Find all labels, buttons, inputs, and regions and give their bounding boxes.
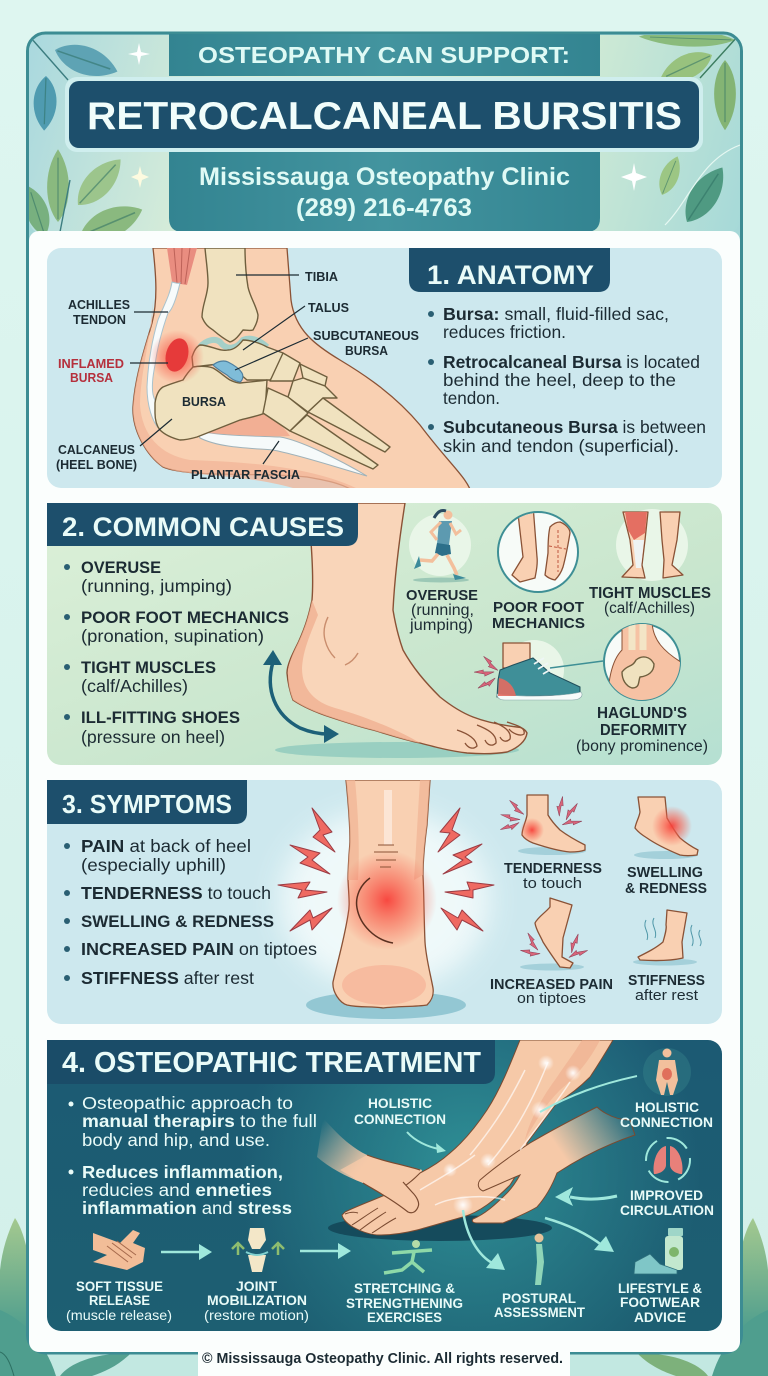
symptoms list [64,836,317,988]
causes list: ILL-FITTING SHOES [81,708,240,727]
overuse label: (running, [411,602,474,619]
holistic connection callout: CONNECTION [354,1112,446,1127]
soft tissue label [66,1279,172,1323]
poor foot mechanics label [492,599,585,632]
holistic connection label right: HOLISTIC [635,1100,699,1115]
symptoms list: STIFFNESS after rest [81,968,254,988]
anatomy labels and leader lines: PLANTAR FASCIA [191,468,300,482]
tight muscles label [589,585,711,617]
swelling label: & REDNESS [625,881,707,897]
stiffness label [628,973,705,1004]
symptoms list: PAIN at back of heel [81,836,251,856]
anatomy labels and leader lines: TIBIA [305,270,338,284]
holistic connection callout [354,1096,446,1153]
heading: anatomy [409,248,610,292]
anatomy bullet text: Bursa: small, fluid-filled sac, [443,304,669,324]
arrow: joint to stretching [300,1243,351,1259]
anatomy labels and leader lines: INFLAMED [58,357,124,371]
lifestyle label: ADVICE [634,1310,686,1325]
header leaves right [639,28,740,229]
clinic banner: (289) 216-4763 [296,194,472,222]
causes list [64,558,289,747]
postural assessment label: POSTURAL [502,1291,576,1306]
anatomy labels and leader lines: (HEEL BONE) [56,458,137,472]
icon: standing person [534,1234,544,1285]
stretching label: STRENGTHENING [346,1296,463,1311]
arrow: soft tissue to joint [161,1244,212,1260]
icon: runner [409,510,471,582]
anatomy labels and leader lines: BURSA [182,395,226,409]
icon: poor foot mechanics [498,505,578,592]
stretching label [346,1281,463,1325]
header background [29,35,740,235]
treatment bullet text: Reduces inflammation, [82,1162,283,1182]
anatomy labels and leader lines: TENDON [73,313,126,327]
symptoms list: TENDERNESS to touch [81,883,271,903]
anatomy bullet text: tendon. [443,388,500,408]
stiffness label: after rest [635,987,699,1004]
poor foot mechanics label: POOR FOOT [493,599,584,616]
tenderness label: to touch [523,875,582,892]
anatomy labels and leader lines [56,270,419,482]
anatomy bullet text: behind the heel, deep to the [443,370,676,390]
anatomy labels and leader lines: BURSA [345,344,388,358]
anatomy bullet text: reduces friction. [443,322,566,342]
treatment bullet text: inflammation and stress [82,1198,292,1218]
causes list: (calf/Achilles) [81,676,188,696]
panel: common causes [47,503,722,765]
anatomy bullet text: Retrocalcaneal Bursa is located [443,352,700,372]
arrow: from body to leg [540,1076,637,1112]
arrow: to lifestyle [545,1218,614,1252]
treatment foot and hands illustration [317,1040,635,1241]
postural assessment label: ASSESSMENT [494,1305,586,1320]
heading: common causes: 2. COMMON CAUSES [62,512,344,542]
soft tissue label: (muscle release) [66,1307,172,1323]
tight muscles label: TIGHT MUSCLES [589,585,711,602]
movement arrow [263,650,339,743]
joint mobilization label [204,1279,309,1323]
swelling label [625,865,707,897]
icon: swelling foot [634,797,698,859]
anatomy labels and leader lines: TALUS [308,301,349,315]
increased pain label [490,977,613,1007]
overuse label [406,587,478,634]
heading: common causes [47,503,358,546]
tenderness label [504,861,602,892]
title [65,77,703,152]
arrow: to foot [555,1187,617,1206]
heel illustration [306,780,466,1019]
lifestyle label: FOOTWEAR [620,1295,700,1310]
symptoms list: SWELLING & REDNESS [81,912,274,931]
stiffness label: STIFFNESS [628,973,705,989]
haglund's deformity label: HAGLUND'S [597,705,687,722]
icon: haglund circle [604,620,684,702]
treatment bullet text: reducies and enneties [82,1180,272,1200]
icon: body holistic [643,1048,691,1096]
heading: osteopathic treatment [47,1040,495,1084]
joint mobilization label: (restore motion) [204,1307,309,1323]
soft tissue label: RELEASE [89,1293,150,1308]
header leaves left [29,40,142,232]
overuse label: OVERUSE [406,587,478,604]
icon: tight muscles legs [616,509,688,581]
icon: soft tissue release [93,1230,145,1270]
icon: shoe [474,640,603,700]
haglund's deformity label: DEFORMITY [600,722,688,739]
treatment bullet text: manual therapirs to the full [82,1111,317,1131]
icon: stretching figure [384,1240,432,1273]
haglund's deformity label: (bony prominence) [576,738,708,755]
top banner [169,34,600,76]
causes list: (pressure on heel) [81,727,225,747]
haglund's deformity label [576,705,708,755]
heading: osteopathic treatment: 4. OSTEOPATHIC TREATMENT [62,1047,481,1079]
improved circulation label: CIRCULATION [620,1203,714,1218]
causes list: (pronation, supination) [81,626,264,646]
arrow: to postural assessment [463,1210,505,1270]
symptoms list: INCREASED PAIN on tiptoes [81,939,317,959]
icon: lungs circulation [646,1138,690,1182]
treatment bullet text: body and hip, and use. [82,1130,270,1150]
stretching label: STRETCHING & [354,1281,455,1296]
overuse label: jumping) [409,617,473,634]
panel: symptoms [47,780,722,1024]
clinic banner: Mississauga Osteopathy Clinic [199,163,570,191]
decorative corner leaves at bottom [0,1218,768,1376]
anatomy bullet text: skin and tendon (superficial). [443,436,679,456]
anatomy labels and leader lines: CALCANEUS [58,443,135,457]
holistic connection callout: HOLISTIC [368,1096,432,1111]
panel: osteopathic treatment [47,1040,722,1331]
title: RETROCALCANEAL BURSITIS [87,95,682,138]
icon: stiffness foot [633,910,701,966]
causes list: TIGHT MUSCLES [81,658,216,677]
anatomy labels and leader lines: BURSA [70,371,113,385]
soft tissue label: SOFT TISSUE [76,1279,163,1294]
top banner: OSTEOPATHY CAN SUPPORT: [198,42,570,68]
increased pain label: on tiptoes [517,990,586,1007]
icon: tenderness foot [500,795,586,855]
stretching label: EXERCISES [367,1310,442,1325]
improved circulation label [620,1188,714,1218]
tenderness label: TENDERNESS [504,861,602,877]
anatomy labels and leader lines: SUBCUTANEOUS [313,329,419,343]
anatomy bullet text [428,304,706,456]
large foot illustration [275,503,527,758]
footer copyright [198,1350,570,1376]
swelling label: SWELLING [627,865,703,881]
anatomical foot illustration [133,248,472,495]
holistic connection label right: CONNECTION [620,1115,713,1130]
causes list: OVERUSE [81,558,161,577]
footer copyright: © Mississauga Osteopathy Clinic. All rights reserved. [202,1351,563,1367]
main white panel [29,231,740,1352]
treatment bullet text: Osteopathic approach to [82,1093,293,1113]
panel: anatomy [47,248,722,495]
holistic connection label right [620,1100,713,1130]
increased pain label: INCREASED PAIN [490,977,613,993]
icon: tiptoe foot [520,898,588,970]
lifestyle label [618,1281,702,1325]
icon: shoe and bottle [634,1228,683,1274]
joint mobilization label: MOBILIZATION [207,1293,307,1308]
lifestyle label: LIFESTYLE & [618,1281,702,1296]
anatomy bullet text: Subcutaneous Bursa is between [443,417,706,437]
clinic banner [169,152,600,232]
causes list: (running, jumping) [81,576,232,596]
heading: symptoms: 3. SYMPTOMS [62,789,232,819]
anatomy labels and leader lines: ACHILLES [68,298,130,312]
heading: anatomy: 1. ANATOMY [427,260,594,290]
improved circulation label: IMPROVED [630,1188,703,1203]
pain bolts [278,808,494,931]
heading: symptoms [47,780,247,824]
tight muscles label: (calf/Achilles) [604,600,695,617]
icon: joint mobilization [232,1228,284,1272]
postural assessment label [494,1291,586,1320]
poor foot mechanics label: MECHANICS [492,615,585,632]
sparkles [128,43,647,191]
symptoms list: (especially uphill) [81,855,226,875]
treatment bullet text [68,1093,317,1218]
joint mobilization label: JOINT [236,1279,278,1294]
causes list: POOR FOOT MECHANICS [81,608,289,627]
